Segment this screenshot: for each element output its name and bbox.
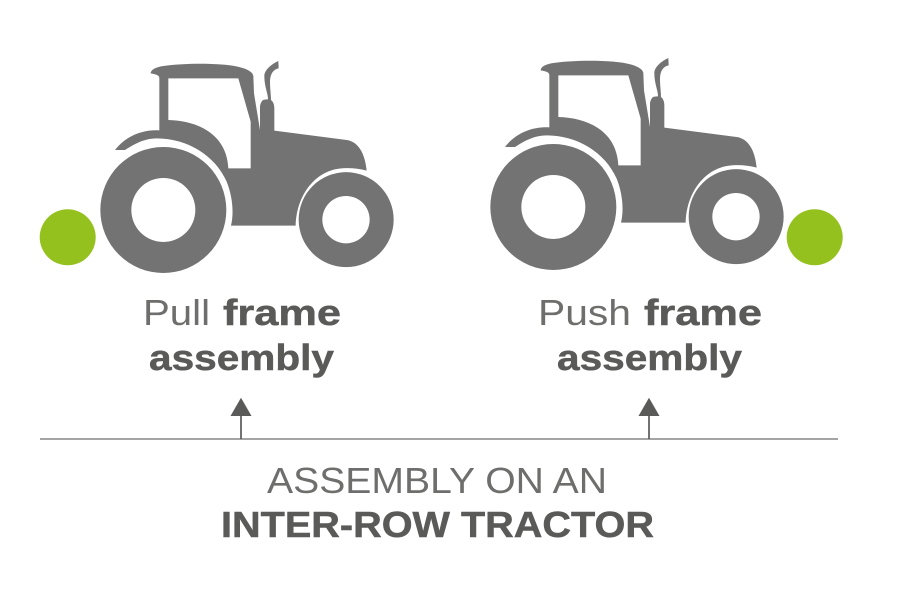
label: pull frame assembly: Pull <box>143 292 210 333</box>
label: push frame assembly: Push <box>538 292 631 333</box>
tractor: pull frame <box>100 61 394 273</box>
baseline rule <box>40 438 838 440</box>
label: push frame assembly: frame <box>644 292 762 333</box>
implement dot: push frame <box>787 209 843 265</box>
label: pull frame assembly: frame <box>223 292 341 333</box>
label: pull frame assembly <box>143 292 341 378</box>
implement dot: pull frame <box>40 209 96 265</box>
arrow: to push frame <box>638 398 660 439</box>
arrow: to pull frame <box>230 398 252 439</box>
label: push frame assembly <box>538 292 762 378</box>
title: assembly on an inter-row tractor: INTER-ROW TRACTOR <box>221 504 654 545</box>
tractor: push frame <box>490 58 784 270</box>
label: pull frame assembly: assembly <box>149 337 334 378</box>
title: assembly on an inter-row tractor <box>221 460 654 545</box>
title: assembly on an inter-row tractor: ASSEMBLY ON AN <box>267 460 607 501</box>
label: push frame assembly: assembly <box>557 337 742 378</box>
